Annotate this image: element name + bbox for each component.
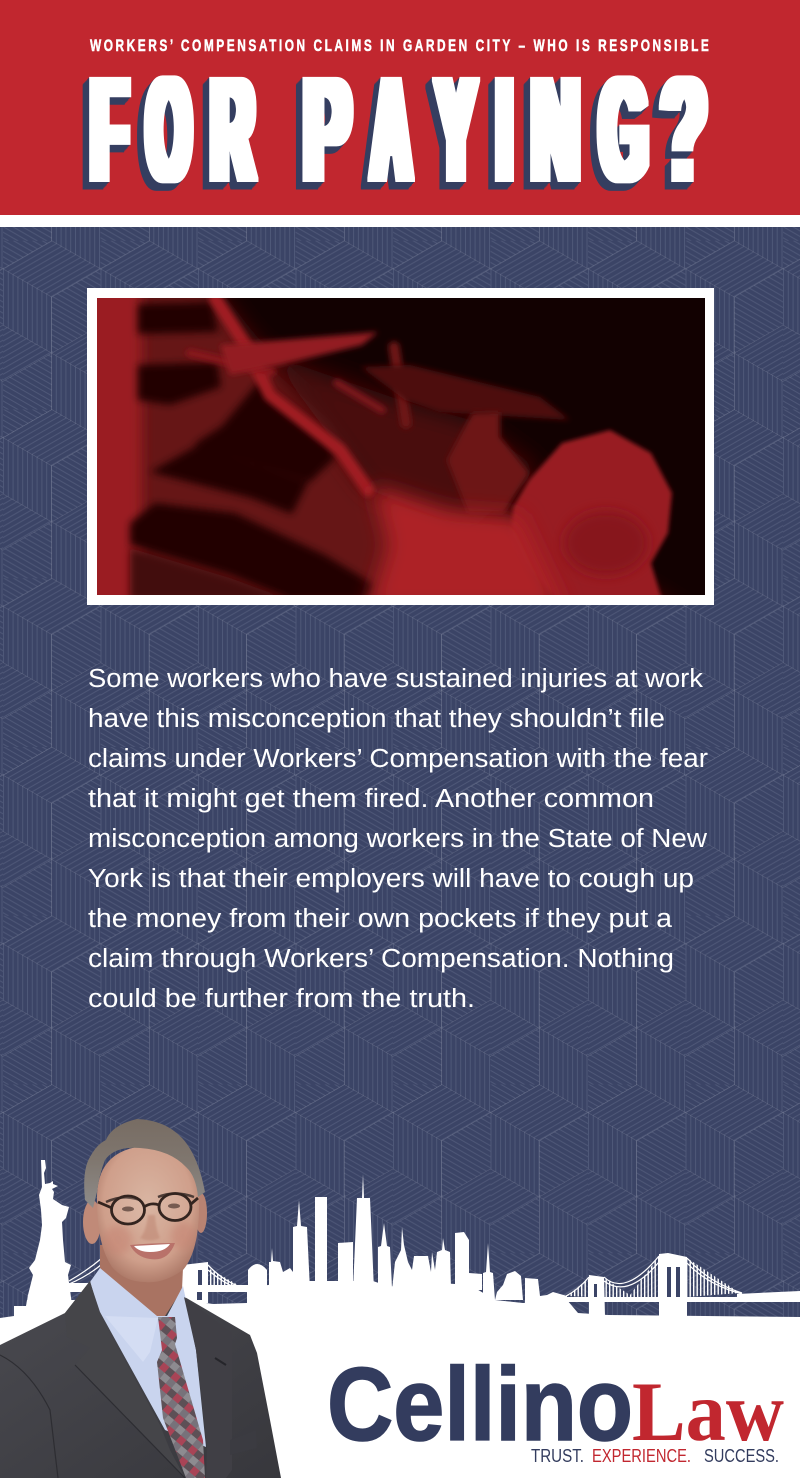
necktie <box>157 1317 205 1478</box>
body paragraph: York is that their employers will have to cough up <box>88 865 694 893</box>
main title: for paying?: N <box>532 48 579 212</box>
main title: for paying?: P <box>304 48 350 212</box>
body paragraph: Some workers who have sustained injuries at work <box>88 665 703 693</box>
body paragraph: have this misconception that they shouldn’t file <box>88 705 665 733</box>
glasses <box>98 1194 198 1224</box>
smile <box>130 1243 175 1259</box>
body paragraph: that it might get them fired. Another common <box>88 785 654 813</box>
new york skyline silhouette <box>0 1160 800 1478</box>
body paragraph: the money from their own pockets if they put a <box>88 905 673 933</box>
buildings <box>248 1174 567 1304</box>
body paragraph: claims under Workers’ Compensation with the fear <box>88 745 709 773</box>
neck <box>100 1245 184 1316</box>
main title: for paying?: Y <box>437 47 475 212</box>
main title: for paying?: A <box>372 48 410 212</box>
suit jacket <box>0 1281 281 1478</box>
body paragraph <box>88 665 709 1013</box>
main title: for paying?: I <box>497 49 511 212</box>
left lapel <box>65 1281 185 1478</box>
tagline: SUCCESS. <box>704 1446 779 1466</box>
main title: for paying?: F <box>91 48 127 211</box>
body paragraph: could be further from the truth. <box>88 985 475 1013</box>
main title: for paying?: ? <box>661 46 707 212</box>
main title: for paying?: G <box>600 47 647 211</box>
icon: statue of liberty <box>26 1160 72 1308</box>
brooklyn bridge <box>566 1253 800 1316</box>
eyebrows and eyes <box>106 1194 194 1202</box>
tagline: TRUST. <box>531 1446 584 1466</box>
tagline: EXPERIENCE. <box>592 1446 691 1466</box>
cellino law logo <box>327 1347 784 1466</box>
right lapel <box>184 1297 232 1478</box>
wordmark: law: Law <box>632 1365 784 1459</box>
shirt and collar <box>90 1268 206 1447</box>
nose <box>140 1215 160 1240</box>
ground and waterfront <box>0 1281 800 1478</box>
face <box>97 1146 199 1282</box>
body paragraph: misconception among workers in the State of New <box>88 825 708 853</box>
bridge left of the portrait <box>68 1258 248 1303</box>
main title: for paying?: R <box>211 47 254 212</box>
main title: for paying?: O <box>147 46 190 212</box>
main title: for paying? <box>91 46 707 212</box>
x-ray image panel <box>80 280 714 620</box>
portrait of attorney <box>0 1119 281 1478</box>
header subtitle: WORKERS’ COMPENSATION CLAIMS IN GARDEN CITY – WHO IS RESPONSIBLE <box>90 37 709 56</box>
ears <box>83 1200 101 1244</box>
header banner <box>0 0 800 227</box>
wordmark: cellino: Cellino <box>327 1347 633 1463</box>
tagline <box>531 1446 779 1466</box>
body paragraph: claim through Workers’ Compensation. Nothing <box>88 945 674 973</box>
hair <box>84 1119 205 1208</box>
